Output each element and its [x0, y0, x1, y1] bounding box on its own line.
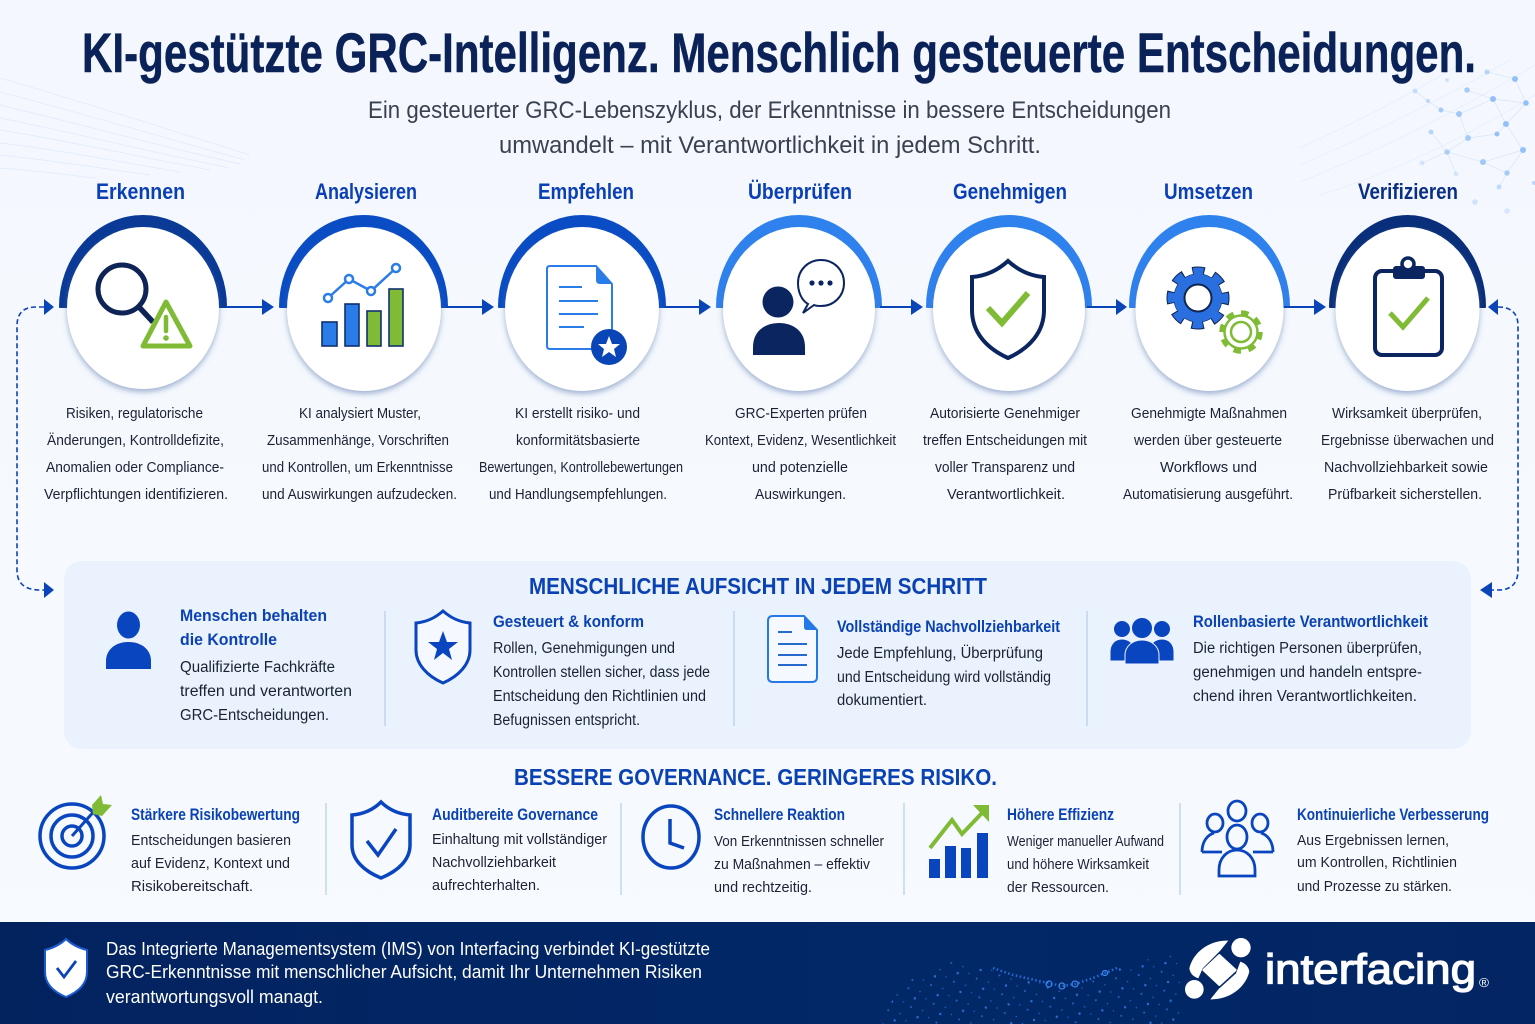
arrow 6 to 7	[1284, 299, 1326, 315]
description	[1321, 405, 1494, 503]
step 4: Überprüfen	[705, 179, 897, 503]
description: konformitätsbasierte	[516, 432, 640, 449]
benefit: Schnellere Reaktion	[643, 805, 884, 896]
benefit: Kontinuierliche Verbesserung: um Kontrollen, Richtlinien	[1297, 854, 1457, 871]
description: voller Transparenz und	[935, 459, 1075, 476]
icon: people	[1202, 801, 1273, 876]
panel heading: MENSCHLICHE AUFSICHT IN JEDEM SCHRITT	[529, 573, 987, 599]
benefit: Stärkere Risikobewertung: auf Evidenz, Kontext und	[131, 855, 290, 872]
arrow 2 to 3	[446, 299, 494, 315]
benefit: Auditbereite Governance: aufrechterhalten.	[432, 877, 540, 894]
oversight: Vollständige Nachvollziehbarkeit: Jede Empfehlung, Überprüfung	[837, 644, 1043, 662]
benefit: Kontinuierliche Verbesserung: Aus Ergebnissen lernen,	[1297, 832, 1449, 849]
step 7: Verifizieren	[1321, 179, 1494, 503]
oversight: Gesteuert und konform: Entscheidung den Richtlinien und	[493, 688, 706, 705]
step 3: Empfehlen	[479, 179, 683, 503]
benefit: Höhere Effizienz: Höhere Effizienz	[1007, 805, 1114, 824]
icon: footer shield	[45, 939, 87, 997]
description: Genehmigte Maßnahmen	[1131, 405, 1287, 422]
oversight: Gesteuert und konform: Gesteuert & konform	[493, 612, 644, 631]
oversight: Vollständige Nachvollziehbarkeit: dokumentiert.	[837, 692, 927, 709]
arrow 4 to 5	[880, 299, 923, 315]
description: Kontext, Evidenz, Wesentlichkeit	[705, 432, 897, 449]
oversight: Gesteuert und konform: Befugnissen entspricht.	[493, 712, 640, 729]
benefit: Höhere Effizienz: Weniger manueller Aufwand	[1007, 833, 1164, 850]
heading: Verifizieren	[1358, 179, 1458, 204]
oversight: Rollenbasierte Verantwortlichkeit: genehmigen und handeln entspre-	[1193, 664, 1422, 681]
ring	[927, 216, 1091, 307]
oversight: Gesteuert und konform	[416, 611, 710, 729]
description	[705, 405, 897, 503]
description	[479, 405, 683, 503]
description: Nachvollziehbarkeit sowie	[1324, 459, 1488, 476]
icon: shield with star	[416, 611, 470, 683]
oversight: Menschen behalten die Kontrolle: treffen und verantworten	[180, 683, 352, 700]
logo: interfacing	[1185, 938, 1489, 999]
arrow 5 to 6	[1087, 299, 1127, 315]
benefit: Schnellere Reaktion: Schnellere Reaktion	[714, 805, 845, 824]
benefit: Kontinuierliche Verbesserung: und Prozesse zu stärken.	[1297, 878, 1452, 895]
description: Anomalien oder Compliance-	[46, 459, 224, 476]
description	[1123, 405, 1293, 503]
ring	[717, 216, 881, 307]
footer text: Das Integrierte Managementsystem (IMS) von Interfacing verbindet KI-gestützte	[106, 939, 710, 959]
logo: interfacing: interfacing	[1265, 946, 1476, 992]
description: Änderungen, Kontrolldefizite,	[47, 432, 224, 449]
subtitle: umwandelt – mit Verantwortlichkeit in jedem Schritt.	[499, 132, 1041, 159]
icon: target	[40, 795, 112, 868]
ring	[280, 216, 447, 307]
step 1: Erkennen	[44, 179, 228, 503]
description: Automatisierung ausgeführt.	[1123, 486, 1293, 503]
benefit: Höhere Effizienz: und höhere Wirksamkeit	[1007, 856, 1150, 873]
heading: Umsetzen	[1164, 179, 1253, 204]
description: und Handlungsempfehlungen.	[489, 486, 667, 503]
icon: gears	[1167, 267, 1260, 350]
description: und Kontrollen, um Erkenntnisse	[262, 459, 453, 476]
description: Autorisierte Genehmiger	[930, 405, 1080, 422]
oversight: Menschen behalten die Kontrolle: die Kontrolle	[180, 630, 277, 649]
heading: Analysieren	[315, 179, 417, 204]
benefit: Auditbereite Governance: Nachvollziehbarkeit	[432, 854, 557, 871]
step 2: Analysieren	[262, 179, 457, 503]
benefit: Auditbereite Governance: Einhaltung mit vollständiger	[432, 831, 607, 848]
arrow 1 to 2	[226, 299, 274, 315]
oversight: Gesteuert und konform: Rollen, Genehmigungen und	[493, 640, 675, 657]
benefit: Stärkere Risikobewertung: Entscheidungen basieren	[131, 832, 291, 849]
ring	[1130, 216, 1289, 307]
footer text	[106, 939, 710, 1007]
benefit: Stärkere Risikobewertung: Stärkere Risikobewertung	[131, 805, 300, 824]
description: Wirksamkeit überprüfen,	[1332, 405, 1482, 422]
oversight: Menschen behalten die Kontrolle: Menschen behalten	[180, 606, 327, 625]
step 6: Umsetzen	[1123, 179, 1293, 503]
icon: person	[106, 612, 151, 669]
description: Verantwortlichkeit.	[947, 486, 1065, 503]
footer banner	[0, 922, 1535, 1024]
description: KI analysiert Muster,	[299, 405, 421, 422]
icon: rising chart	[929, 805, 989, 878]
oversight: Vollständige Nachvollziehbarkeit: und Entscheidung wird vollständig	[837, 669, 1051, 686]
icon: clock	[643, 806, 699, 868]
benefit: Schnellere Reaktion: Von Erkenntnissen schneller	[714, 833, 884, 850]
ring	[1330, 216, 1485, 307]
oversight: Vollständige Nachvollziehbarkeit: Vollständige Nachvollziehbarkeit	[837, 617, 1060, 636]
oversight: Rollenbasierte Verantwortlichkeit: Die richtigen Personen überprüfen,	[1193, 640, 1422, 657]
heading: Überprüfen	[748, 179, 852, 204]
benefit: Stärkere Risikobewertung	[40, 795, 300, 895]
benefit: Schnellere Reaktion: zu Maßnahmen – effektiv	[714, 856, 870, 873]
benefit: Kontinuierliche Verbesserung: Kontinuierliche Verbesserung	[1297, 805, 1489, 824]
benefit: Schnellere Reaktion: und rechtzeitig.	[714, 879, 812, 896]
benefit: Höhere Effizienz: der Ressourcen.	[1007, 879, 1109, 896]
description: Workflows und	[1160, 459, 1257, 476]
description: GRC-Experten prüfen	[735, 405, 867, 422]
description	[44, 405, 228, 503]
arrow 3 to 4	[664, 299, 711, 315]
benefit: Kontinuierliche Verbesserung	[1202, 801, 1489, 895]
subtitle	[368, 97, 1171, 159]
benefits heading: BESSERE GOVERNANCE. GERINGERES RISIKO.	[514, 764, 997, 790]
description: werden über gesteuerte	[1133, 432, 1282, 449]
description: und potenzielle	[752, 459, 848, 476]
feedback loop arrows	[17, 299, 1518, 598]
oversight: Rollenbasierte Verantwortlichkeit: chend ihren Verantwortlichkeiten.	[1193, 688, 1417, 705]
oversight: Menschen behalten die Kontrolle: Qualifizierte Fachkräfte	[180, 659, 335, 676]
description: Risiken, regulatorische	[66, 405, 203, 422]
panel: human oversight	[64, 561, 1471, 749]
logo: interfacing: ®	[1479, 975, 1489, 990]
footer text: GRC-Erkenntnisse mit menschlicher Aufsicht, damit Ihr Unternehmen Risiken	[106, 962, 702, 982]
description: Ergebnisse überwachen und	[1321, 432, 1494, 449]
description: treffen Entscheidungen mit	[923, 432, 1088, 449]
oversight: Vollständige Nachvollziehbarkeit	[768, 616, 1060, 709]
description	[923, 405, 1088, 503]
oversight: Menschen behalten die Kontrolle	[106, 606, 352, 724]
description: Verpflichtungen identifizieren.	[44, 486, 228, 503]
heading: Empfehlen	[538, 179, 634, 204]
oversight: Rollenbasierte Verantwortlichkeit	[1110, 612, 1428, 705]
icon: document with star	[547, 266, 627, 365]
icon: shield with check	[352, 802, 410, 878]
oversight: Gesteuert und konform: Kontrollen stellen sicher, dass jede	[493, 664, 710, 681]
subtitle: Ein gesteuerter GRC-Lebenszyklus, der Erkenntnisse in bessere Entscheidungen	[368, 97, 1171, 124]
icon: team	[1110, 618, 1174, 664]
benefit: Auditbereite Governance: Auditbereite Governance	[432, 805, 598, 824]
description: und Auswirkungen aufzudecken.	[262, 486, 457, 503]
description: KI erstellt risiko- und	[515, 405, 640, 422]
ring	[60, 216, 226, 307]
heading: Genehmigen	[953, 179, 1067, 204]
step 5: Genehmigen	[923, 179, 1091, 503]
icon: chart	[322, 264, 403, 346]
ring	[499, 216, 665, 307]
description: Auswirkungen.	[755, 486, 846, 503]
icon: document	[768, 616, 817, 682]
description: Zusammenhänge, Vorschriften	[267, 432, 449, 449]
heading: Erkennen	[96, 179, 185, 204]
benefit: Höhere Effizienz	[929, 805, 1164, 896]
oversight: Menschen behalten die Kontrolle: GRC-Entscheidungen.	[180, 707, 329, 724]
benefit: Auditbereite Governance	[352, 802, 607, 894]
description: Bewertungen, Kontrollebewertungen	[479, 459, 683, 476]
footer text: verantwortungsvoll managt.	[106, 987, 323, 1007]
icon: magnifier and warning	[98, 265, 190, 346]
benefit: Stärkere Risikobewertung: Risikobereitschaft.	[131, 878, 253, 895]
icon: clipboard with check	[1375, 258, 1442, 355]
icon: reviewer with speech bubble	[753, 260, 844, 355]
description	[262, 405, 457, 503]
description: Prüfbarkeit sicherstellen.	[1328, 486, 1482, 503]
oversight: Rollenbasierte Verantwortlichkeit: Rollenbasierte Verantwortlichkeit	[1193, 612, 1428, 631]
icon: shield with check	[972, 261, 1044, 358]
